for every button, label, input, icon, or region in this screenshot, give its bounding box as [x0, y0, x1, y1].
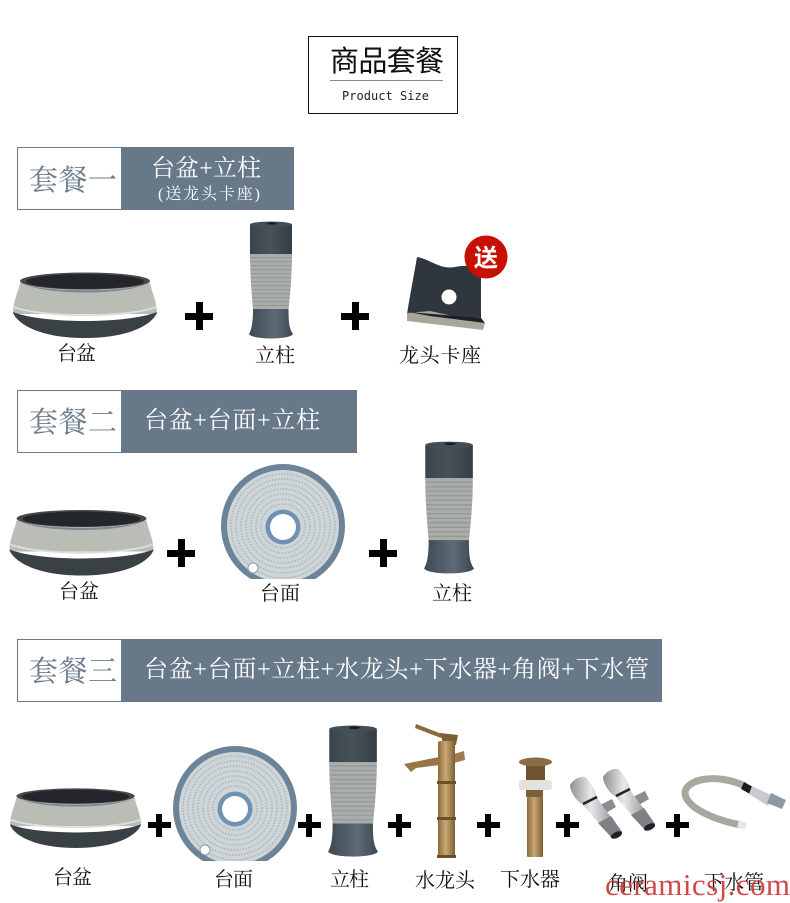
plus: [556, 814, 579, 837]
icon: angle valves: [570, 769, 656, 840]
basin: [10, 788, 141, 848]
label pillar: 立柱: [255, 344, 295, 367]
plus: [167, 539, 195, 567]
package two header: [18, 390, 357, 453]
icon: faucet bracket: [407, 257, 485, 330]
label countertop: 台面: [214, 868, 253, 891]
icon: drain hose: [685, 779, 786, 826]
label pillar: 立柱: [330, 868, 369, 891]
pillar: [249, 222, 293, 338]
title subtitle: Product Size: [342, 89, 429, 103]
basin: [13, 272, 157, 338]
title box: [308, 36, 458, 114]
plus: [148, 814, 171, 837]
package two header: 台盆+台面+立柱: [144, 407, 320, 434]
badge: gift: 送: [474, 245, 498, 272]
package three header: 台盆+台面+立柱+水龙头+下水器+角阀+下水管: [144, 656, 649, 683]
basin: [10, 510, 154, 576]
package one header: 台盆+立柱: [151, 155, 261, 182]
package two header: 套餐二: [29, 406, 117, 439]
package one header: (送龙头卡座): [158, 185, 260, 203]
label basin: 台盆: [53, 866, 92, 889]
package three header: 套餐三: [29, 655, 117, 688]
label countertop: 台面: [260, 582, 300, 605]
label faucet bracket: 龙头卡座: [399, 344, 481, 367]
panel: package three: [10, 639, 786, 895]
label faucet: 水龙头: [415, 869, 476, 892]
countertop disc: [173, 746, 297, 870]
pillar: [424, 442, 474, 573]
package one header: [18, 147, 294, 210]
label pillar: 立柱: [432, 582, 472, 605]
title heading: 商品套餐: [330, 45, 444, 78]
plus: [477, 814, 500, 837]
plus: [341, 302, 369, 330]
panel: package one: [13, 147, 508, 367]
label basin: 台盆: [57, 342, 96, 365]
badge: gift: [464, 236, 508, 278]
countertop disc: [221, 464, 345, 588]
package three header: [18, 639, 662, 702]
plus: [369, 539, 397, 567]
plus: [185, 302, 213, 330]
package one header: 套餐一: [29, 164, 117, 197]
watermark: ceramicsj.com: [605, 867, 790, 902]
icon: faucet: [404, 724, 465, 858]
icon: drain: [519, 758, 552, 857]
pillar: [328, 726, 378, 857]
plus: [298, 814, 321, 837]
label angle valve: 角阀: [608, 872, 648, 895]
label drain hose: 下水管: [704, 871, 764, 894]
label basin: 台盆: [59, 580, 99, 603]
plus: [388, 814, 411, 837]
label drain: 下水器: [500, 868, 560, 891]
panel: package two: [10, 390, 474, 605]
plus: [666, 814, 689, 837]
